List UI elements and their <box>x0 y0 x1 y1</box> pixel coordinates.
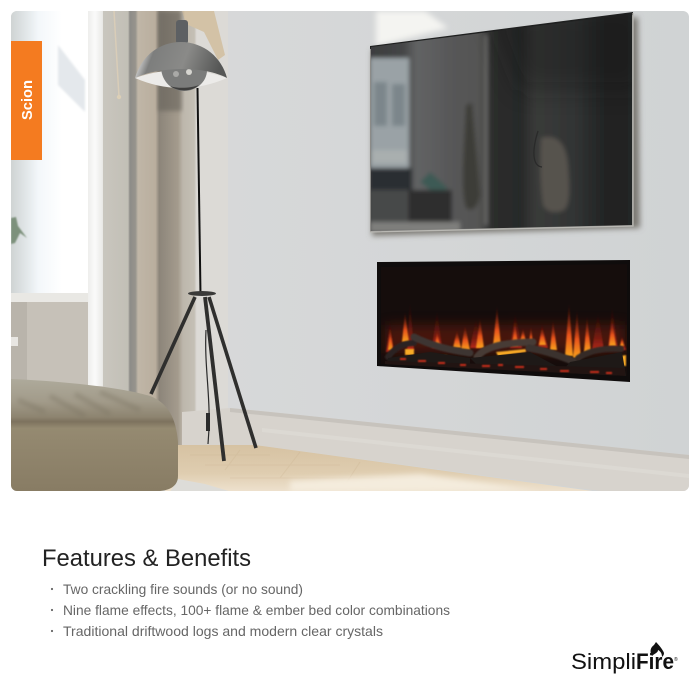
wall <box>11 11 689 491</box>
label tab: Scion <box>11 41 42 160</box>
orange flames <box>388 303 624 358</box>
lamp neck <box>176 20 188 44</box>
icon: flame <box>651 642 664 657</box>
SimpliFire logo: ® <box>674 656 678 663</box>
hot yellow flame bases <box>405 349 626 366</box>
driftwood logs <box>388 337 621 365</box>
floor <box>165 445 600 492</box>
fireplace <box>377 260 630 382</box>
window <box>11 11 89 296</box>
fireplace back glow <box>385 325 625 353</box>
SimpliFire logo: Simpli <box>571 649 636 674</box>
window sill and lower wall <box>11 293 89 392</box>
TV screen <box>371 15 632 231</box>
ottoman <box>11 379 178 491</box>
TV <box>370 12 634 232</box>
reflected window <box>370 58 409 168</box>
feature list <box>51 581 450 639</box>
heading: Features & Benefits <box>42 545 251 572</box>
lamp shade <box>135 42 227 78</box>
fireplace frame <box>377 260 630 382</box>
curtain ties <box>114 11 119 97</box>
tripod ring <box>188 291 216 296</box>
TV shadow <box>372 17 640 236</box>
lamp bulb <box>161 67 207 91</box>
room photograph <box>11 5 689 492</box>
fireplace interior <box>381 305 627 376</box>
SimpliFire logo: Fire <box>636 649 674 674</box>
ember bed <box>385 361 625 376</box>
wall sunlight patch <box>376 11 448 46</box>
reflected curtain <box>485 35 487 225</box>
dark upper corner <box>524 20 588 89</box>
TV edge highlight <box>370 13 633 232</box>
lamp shade inside <box>135 70 227 88</box>
tripod legs <box>151 297 195 394</box>
curtains <box>88 11 228 446</box>
plant <box>11 217 27 244</box>
lamp pole <box>198 88 200 295</box>
baseboard <box>182 408 689 491</box>
floor lamp <box>135 20 256 461</box>
bullet three: Traditional driftwood logs and modern clear crystals <box>63 623 383 639</box>
bullet two: Nine flame effects, 100+ flame & ember bed color combinations <box>63 602 450 618</box>
reflected sofa and plant <box>370 168 412 190</box>
bullet one: Two crackling fire sounds (or no sound) <box>63 581 303 597</box>
SimpliFire logo <box>571 642 678 674</box>
rug <box>171 479 228 491</box>
tab text: Scion <box>20 80 36 120</box>
reflected wall hanging <box>540 137 569 212</box>
lamp cord <box>206 330 209 444</box>
red flames <box>385 310 627 353</box>
TV frame <box>370 13 633 232</box>
